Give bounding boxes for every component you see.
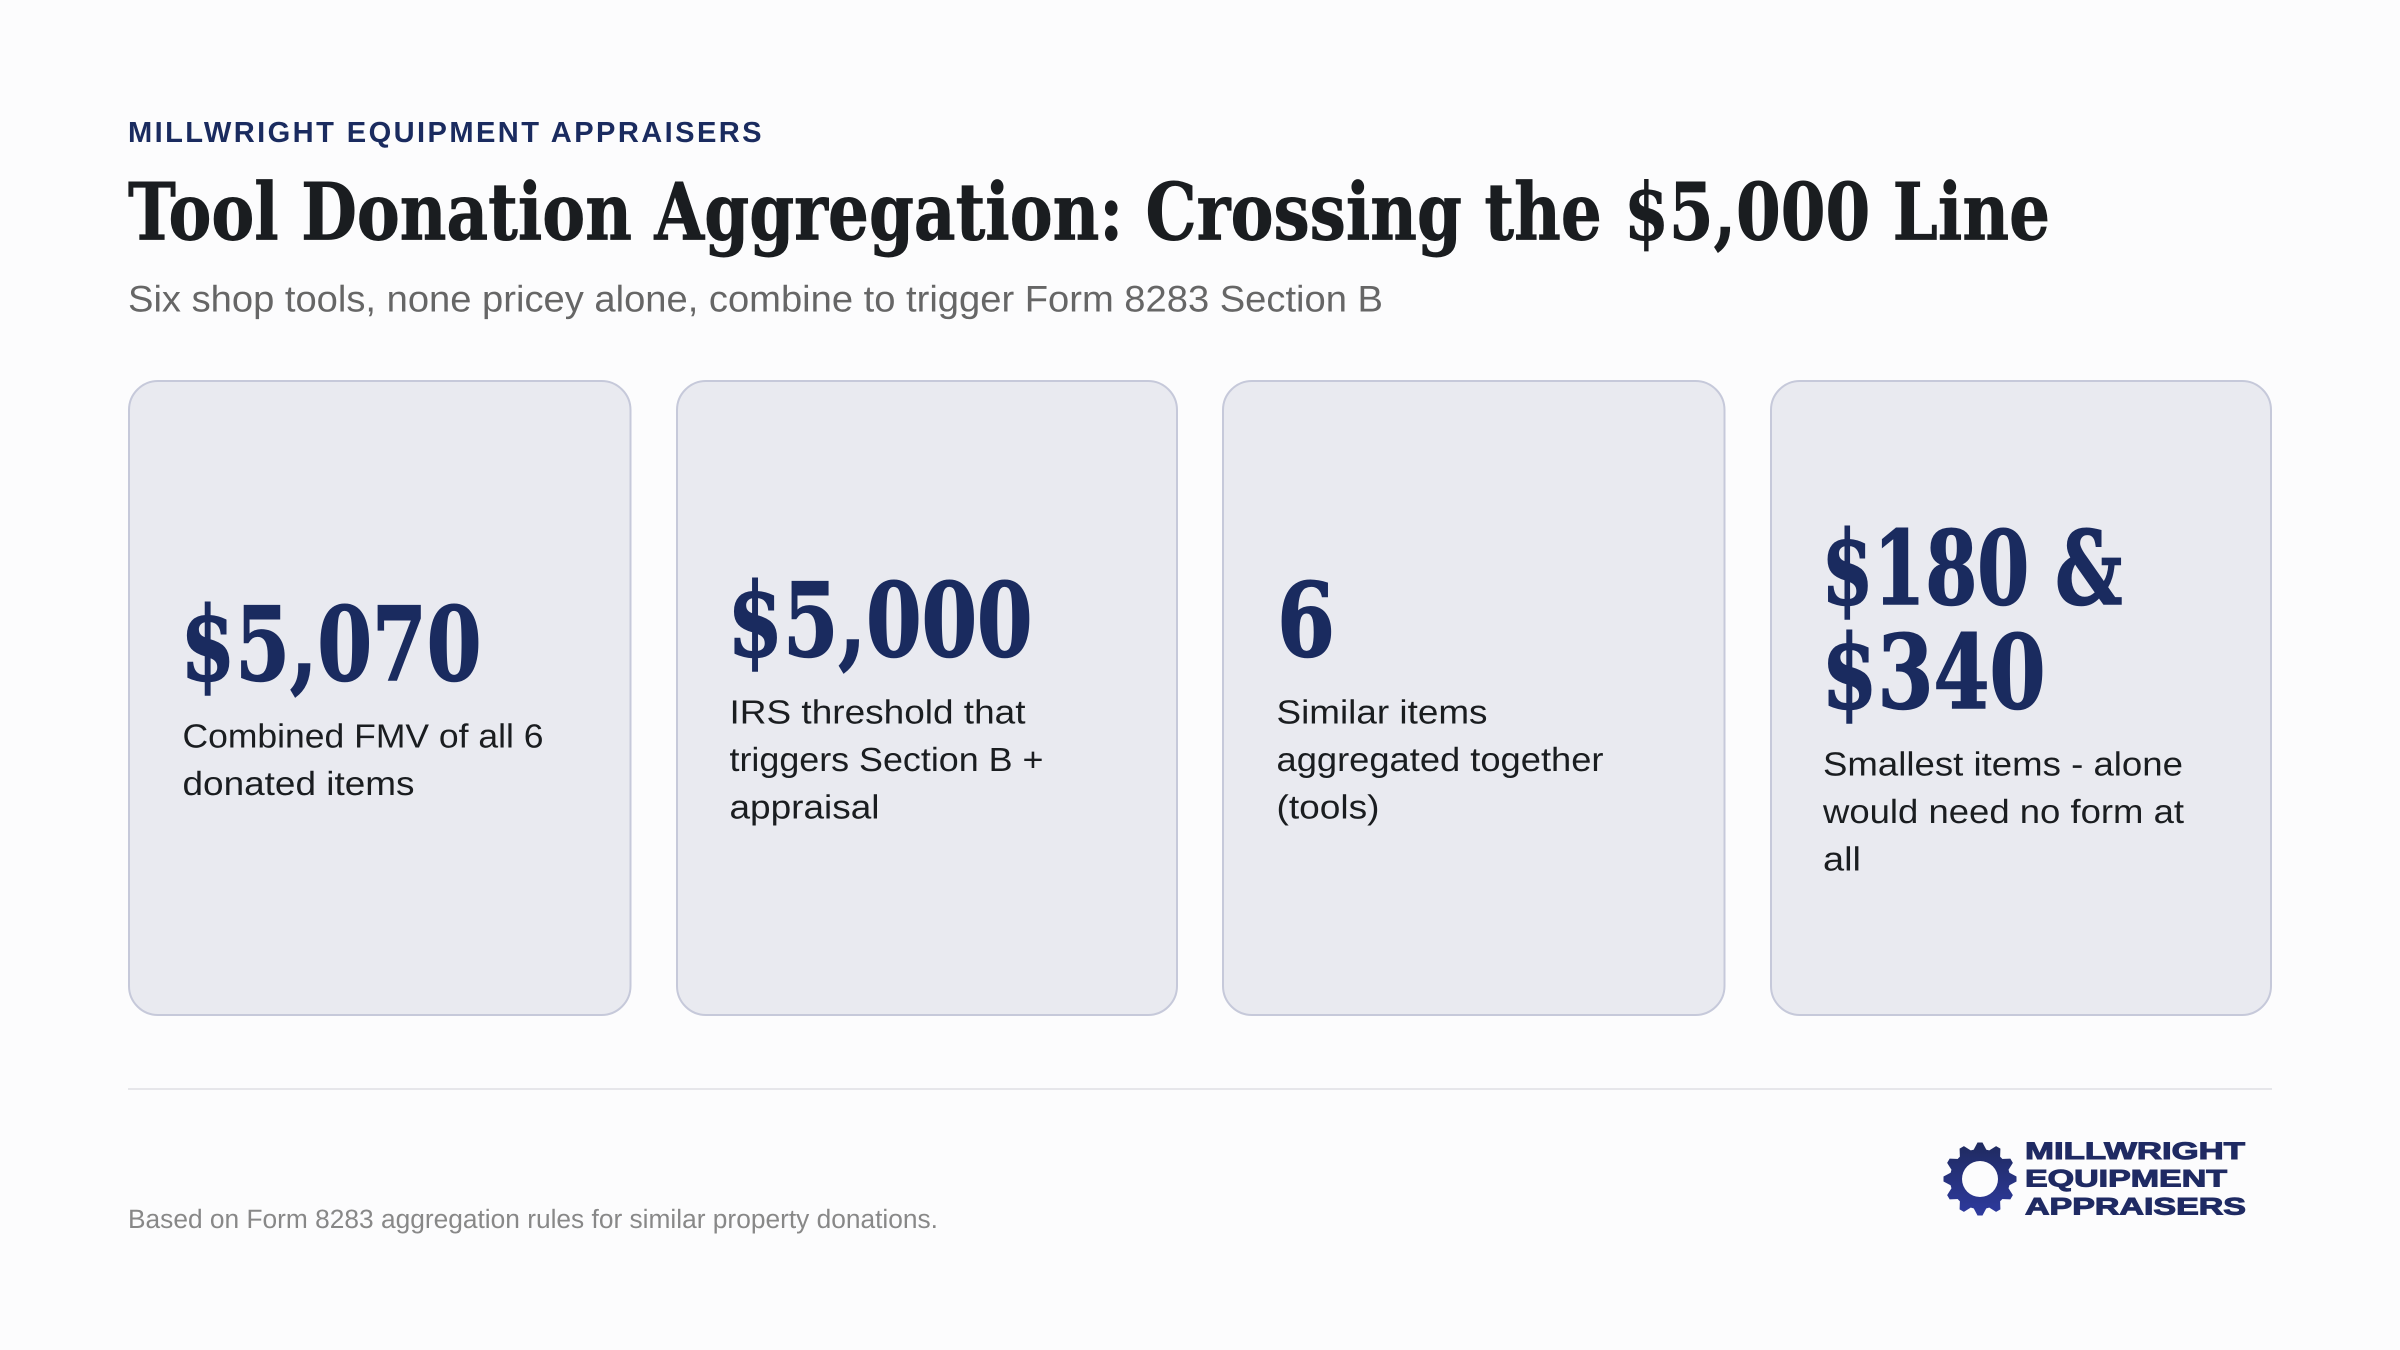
logo wordmark: EQUIPMENT [2025, 1166, 2227, 1192]
description: smallest items: Smallest items - alone [1823, 746, 2183, 784]
value: $5,000: $5,000 [728, 561, 1032, 681]
panel: IRS threshold [677, 381, 1177, 1015]
value: $180 & $340: $180 & [1822, 509, 2122, 629]
logo: Millwright Equipment Appraisers [1944, 1142, 2246, 1216]
description: smallest items: all [1823, 842, 1861, 878]
description: similar items: Similar items [1276, 694, 1488, 732]
logo wordmark: MILLWRIGHT [2025, 1138, 2245, 1165]
panel: similar items [1223, 381, 1724, 1015]
description: IRS threshold: appraisal [730, 790, 880, 826]
description: similar items: aggregated together [1276, 742, 1604, 779]
description: smallest items: would need no form at [1822, 794, 2185, 831]
description: combined FMV: donated items [182, 766, 414, 803]
logo wordmark: APPRAISERS [2025, 1194, 2246, 1220]
description: IRS threshold: IRS threshold that [730, 694, 1026, 732]
kicker: company name: MILLWRIGHT EQUIPMENT APPRAISERS [128, 117, 764, 149]
footnote: Based on Form 8283 aggregation rules for similar property donations. [128, 1204, 938, 1234]
value: $5,070: $5,070 [180, 585, 482, 705]
panel: smallest items [1771, 381, 2271, 1015]
description: combined FMV: Combined FMV of all 6 [182, 718, 544, 756]
icon: gear [1944, 1142, 2016, 1216]
description: similar items: (tools) [1276, 790, 1380, 826]
subtitle: Six shop tools, none pricey alone, combine to trigger Form 8283 Section B [128, 278, 1383, 320]
panel: combined FMV [129, 381, 630, 1015]
description: IRS threshold: triggers Section B + [730, 742, 1044, 779]
value: 6: 6 [1277, 561, 1335, 681]
value: $180 & $340: $340 [1822, 613, 2046, 733]
